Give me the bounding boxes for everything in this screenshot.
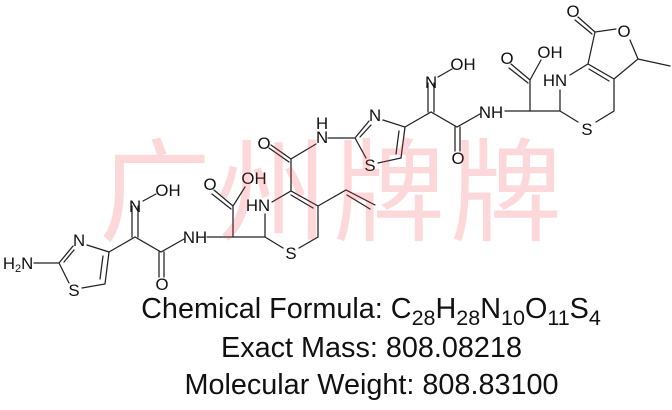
middle cephem ring fragment: O <box>257 134 271 153</box>
central thiazole oxime fragment <box>328 55 530 175</box>
right furo-thiazine fragment <box>500 2 670 139</box>
exact mass: Exact Mass: 808.08218 <box>221 332 522 364</box>
right furo-thiazine fragment: HN <box>543 71 567 90</box>
chemical formula: N <box>480 293 501 325</box>
left aminothiazole oxime fragment: O <box>155 275 169 294</box>
molecular structure <box>3 2 670 300</box>
central thiazole oxime fragment: NH <box>479 103 503 122</box>
chemical formula: Chemical Formula: C <box>141 293 412 325</box>
watermark: 广州牌牌 <box>99 131 567 256</box>
molecular weight: Molecular Weight: 808.83100 <box>184 369 559 401</box>
chemical formula: 28 <box>456 306 480 330</box>
left aminothiazole oxime fragment <box>3 181 233 300</box>
left aminothiazole oxime fragment: H <box>3 254 15 273</box>
chemical formula: S <box>570 293 589 325</box>
chemical formula: 10 <box>501 306 525 330</box>
right furo-thiazine fragment: O <box>500 49 514 68</box>
left aminothiazole oxime fragment: N <box>129 197 141 216</box>
middle cephem ring fragment: OH <box>241 169 267 188</box>
chemical formula: 11 <box>547 306 570 330</box>
chemical formula: 4 <box>589 306 601 330</box>
right furo-thiazine fragment: O <box>617 22 631 41</box>
chemical formula: 28 <box>412 306 436 330</box>
central thiazole oxime fragment: S <box>364 156 376 175</box>
middle cephem ring fragment: N <box>316 128 328 147</box>
central thiazole oxime fragment: OH <box>450 55 476 74</box>
chemical formula: O <box>525 293 547 325</box>
central thiazole oxime fragment: N <box>369 106 381 125</box>
chemical formula: H <box>436 293 456 325</box>
left aminothiazole oxime fragment: N <box>73 231 85 250</box>
central thiazole oxime fragment: O <box>451 149 465 168</box>
left aminothiazole oxime fragment: OH <box>155 181 181 200</box>
central thiazole oxime fragment: N <box>425 73 437 92</box>
formula text <box>141 293 601 401</box>
middle cephem ring fragment <box>203 114 375 263</box>
left aminothiazole oxime fragment: 2 <box>15 263 21 275</box>
right furo-thiazine fragment: OH <box>537 43 563 62</box>
left aminothiazole oxime fragment: S <box>68 281 80 300</box>
middle cephem ring fragment: S <box>285 244 297 263</box>
middle cephem ring fragment: O <box>203 175 217 194</box>
right furo-thiazine fragment: S <box>581 120 593 139</box>
left aminothiazole oxime fragment: NH <box>183 228 207 247</box>
left aminothiazole oxime fragment: N <box>21 254 33 273</box>
right furo-thiazine fragment: O <box>566 2 580 21</box>
middle cephem ring fragment: HN <box>246 196 270 215</box>
middle cephem ring fragment: H <box>316 114 328 133</box>
